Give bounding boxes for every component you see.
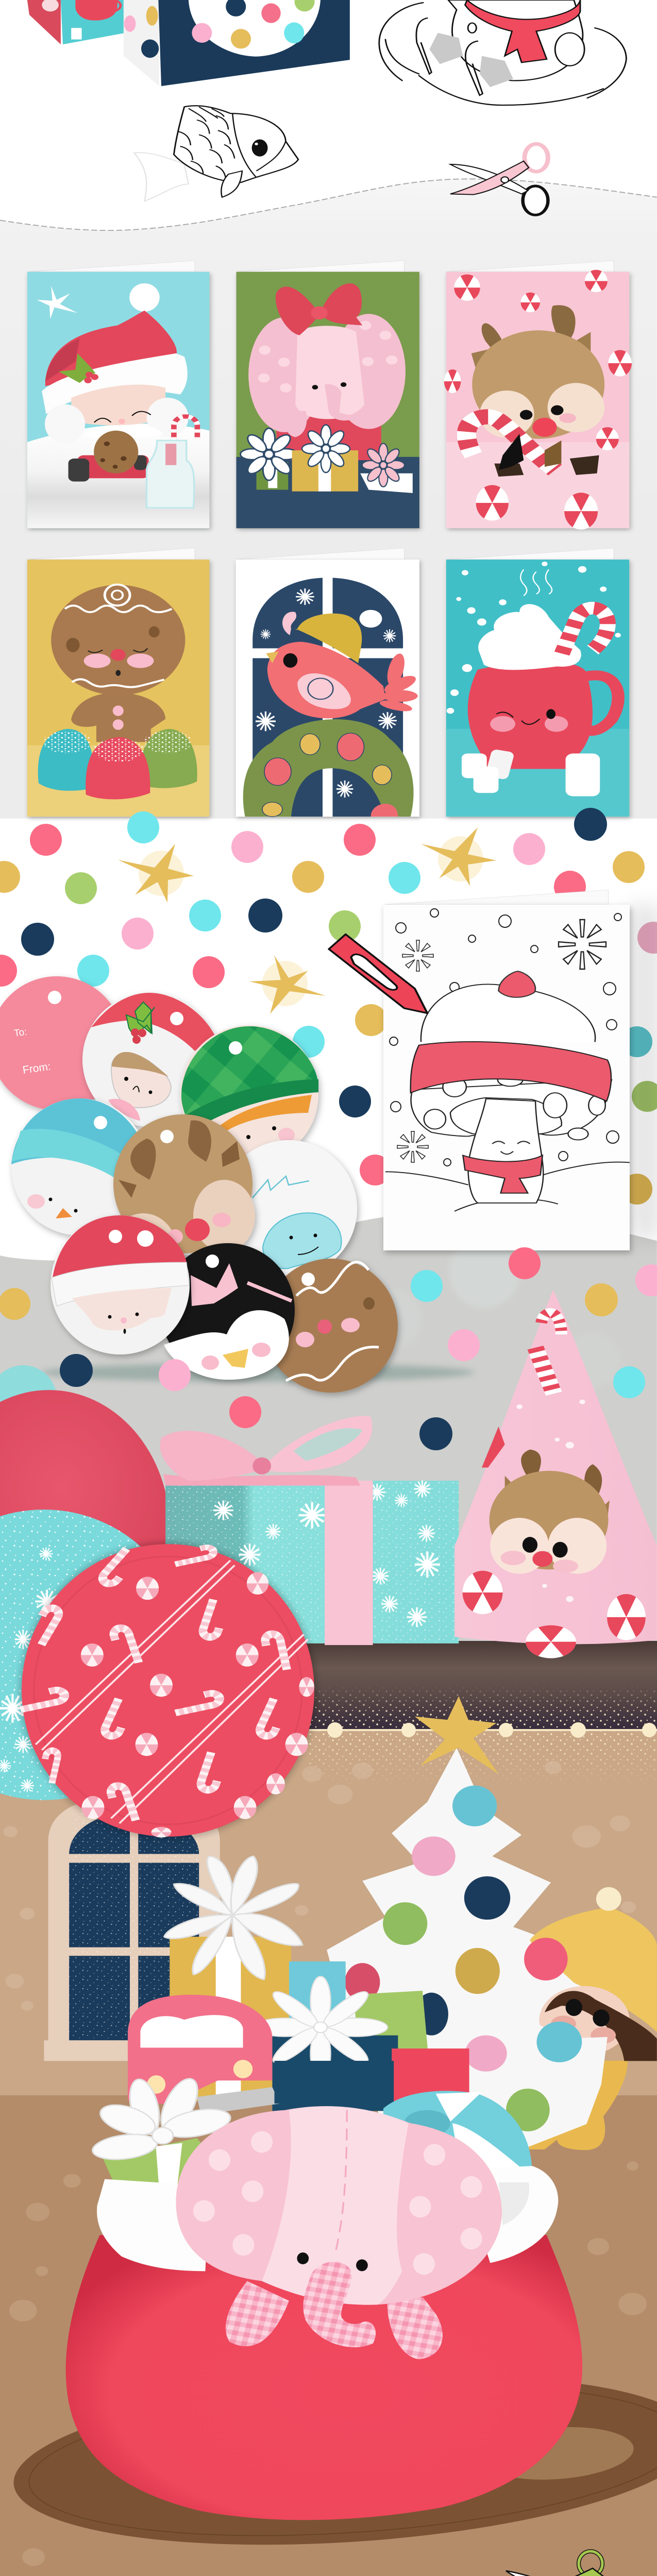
icon: gold star three: [249, 955, 326, 1014]
greeting card: hot cocoa mug: [446, 548, 629, 817]
pink plush elephant: [176, 2106, 502, 2359]
white daisy bow: [254, 1976, 388, 2078]
icon: gold star two: [421, 827, 496, 886]
rug under the sack: [8, 2355, 657, 2565]
gift tag: pink to from: [0, 976, 124, 1110]
icon: outline snowflakes: [397, 920, 606, 1162]
lower confetti dots over the room: [0, 1247, 657, 1450]
party balloon red: [0, 1390, 170, 1670]
tree ornaments: [345, 1786, 582, 2131]
doll legs: [524, 2061, 628, 2150]
gift tag: pink to from: From:: [22, 1061, 52, 1076]
teal snowflake paper plate: [0, 1510, 189, 1800]
gift tag: white yeti: [220, 1140, 357, 1277]
candy cane red paper plate: [16, 1542, 316, 1839]
gift pile behind the sack: [164, 1856, 469, 2111]
mushroom coloring card: [383, 890, 657, 1250]
pink toy car: [128, 1995, 394, 2115]
mockup: navy gift box: [124, 0, 350, 86]
greeting card: bird on wreath at window: [236, 548, 419, 817]
christmas tree, doll and ornaments: [327, 1696, 657, 2150]
doll hat and face: [530, 1887, 657, 2061]
green present with white flower bow: [90, 2075, 234, 2235]
icon: gold star one: [118, 844, 194, 903]
blue beach ball: [383, 2091, 532, 2174]
icon: red crayon: [329, 934, 427, 1013]
gift tag: gingerbread: [264, 1259, 398, 1393]
greeting card: santa with cookie: [27, 261, 209, 528]
icon: pink scissors: [450, 144, 548, 215]
mushroom character: [385, 971, 630, 1211]
illustration: fish: [134, 106, 298, 201]
gift tag: penguin: [161, 1243, 295, 1380]
gift tags cluster: [0, 976, 398, 1393]
small outline circles: [390, 909, 621, 1166]
party hat with reindeer: [454, 1290, 657, 1658]
greeting card: elephant with gifts: [237, 261, 419, 528]
confetti dots pattern: [0, 808, 657, 1205]
icon: green scissors: [505, 2551, 603, 2576]
greeting card: reindeer with candy cane: [444, 261, 632, 530]
window with night sky: [44, 1795, 222, 2061]
gift tag: elf with green hat: [180, 1025, 318, 1163]
lower scene: blurred room background, table, wall and floor: [0, 1217, 657, 2576]
tree body: [327, 1748, 599, 2147]
tree star: [415, 1696, 498, 1774]
gift tag: reindeer: [110, 1114, 255, 1285]
mockup: small gift box top left: [27, 0, 126, 44]
gift tag: snowman with blue hat: [11, 1098, 148, 1235]
greeting card: gingerbread with gumdrops: [27, 548, 209, 817]
gift tag: pink to from: To:: [13, 1027, 28, 1039]
gift box wrapped in teal snowflake paper: [160, 1416, 459, 1645]
tree lower white over doll: [398, 2012, 608, 2147]
red santa sack with fur trim: [66, 2166, 582, 2520]
illustration: skating snowman: [379, 0, 626, 105]
gift tag: santa with knit hat: [50, 1215, 190, 1354]
gift tag: santa with holly: [82, 993, 216, 1127]
